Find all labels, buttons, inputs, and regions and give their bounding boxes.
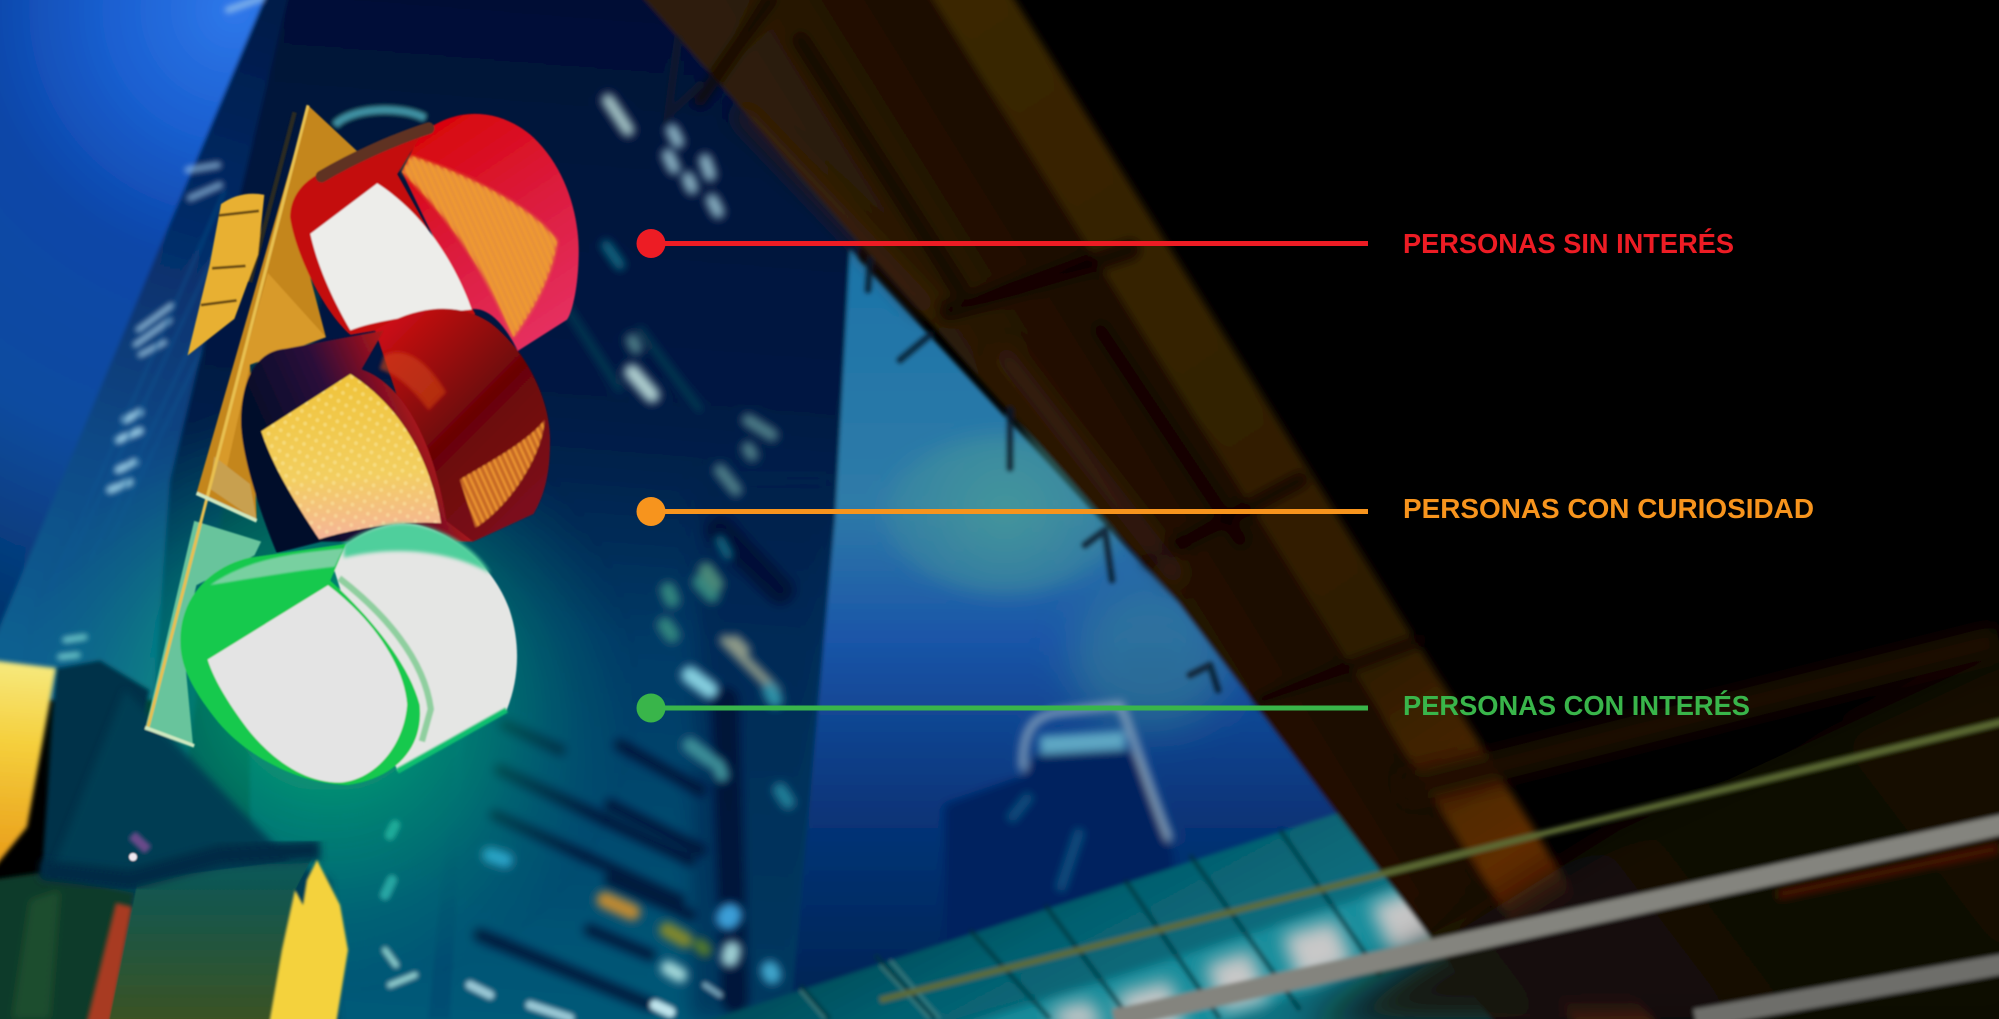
- red visor: [402, 114, 579, 351]
- column behind lower left: [40, 660, 150, 900]
- amber visor: [375, 309, 550, 541]
- red lamp white lens: [310, 183, 472, 330]
- amber LED reflection: [460, 420, 545, 528]
- yellow bracket: [187, 194, 264, 356]
- foreground signal assembly: [0, 105, 579, 1019]
- green visor: [330, 524, 517, 771]
- dark window rows: [480, 530, 780, 1005]
- lower lamp mount: [0, 690, 348, 1019]
- distant skyscraper: [945, 705, 1176, 965]
- green lamp white lens: [208, 585, 407, 783]
- label: personas con curiosidad: PERSONAS CON CURIOSIDAD: [1403, 493, 1814, 524]
- green rim: [180, 544, 420, 785]
- signal glow: [20, 400, 640, 980]
- red lamp: [290, 114, 579, 351]
- red rim: [290, 131, 475, 335]
- lit windows: [490, 100, 788, 975]
- label: personas sin interés: PERSONAS SIN INTERÉS: [1403, 228, 1734, 259]
- marker: personas con interés: [636, 694, 1368, 722]
- bridge brackets: [668, 40, 1218, 690]
- background: left tower: [0, 0, 640, 700]
- marker: personas con curiosidad: [636, 497, 1368, 526]
- backing plate: [145, 105, 357, 746]
- sky between tower and bridge: [720, 250, 1380, 1019]
- lower yellow visor: [268, 860, 348, 1019]
- background: blue sky at left: [0, 0, 320, 720]
- label: personas con interés: PERSONAS CON INTERÉS: [1403, 690, 1750, 721]
- dark mast behind signal: [150, 240, 330, 1019]
- amber lens: [261, 374, 441, 539]
- background: main tower: [130, 0, 860, 1019]
- bridge yellow band: [926, 0, 1660, 1019]
- light trails: [880, 640, 1999, 1019]
- yellow lamp at left edge: [0, 660, 56, 873]
- arc of teal lights above the signal: [335, 110, 425, 125]
- yellow lamp: [241, 309, 550, 553]
- bridge ribs: [700, 0, 1420, 700]
- glass roof: [680, 805, 1500, 1019]
- amber rim: [241, 330, 473, 553]
- tower shading near sky edge: [690, 480, 835, 1019]
- bridge structure: [636, 0, 1660, 1019]
- red LED reflection: [402, 156, 557, 337]
- marker: personas sin interés: [636, 229, 1368, 258]
- traffic light signal: [145, 105, 579, 785]
- green lamp: [180, 524, 517, 785]
